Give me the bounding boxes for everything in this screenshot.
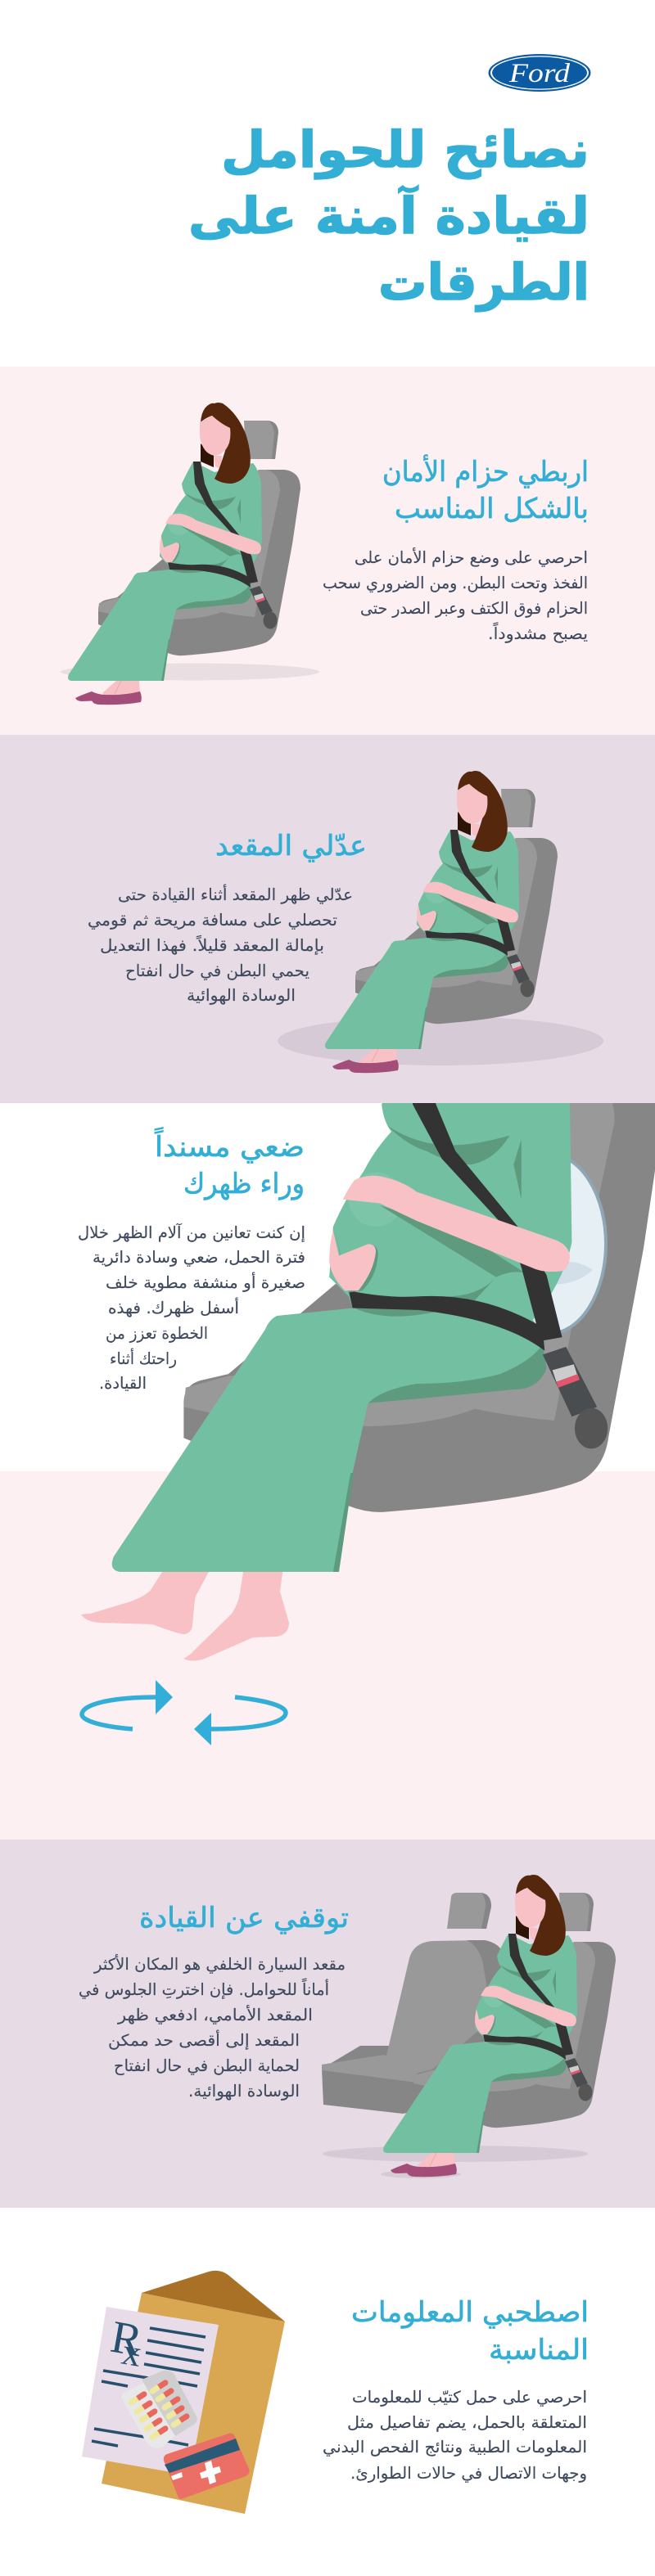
panel: adjust the seat <box>0 735 655 1103</box>
title: لقيادة آمنة على <box>188 185 590 245</box>
Ford logo: Ford <box>508 59 571 88</box>
illustration: envelope and documents <box>82 2271 285 2514</box>
body text: بإمالة المعقد قليلاً. فهذا التعديل <box>100 934 324 956</box>
body text: المعلومات الطبية ونتائج الفحص البدني <box>323 2438 587 2457</box>
body text <box>323 2388 587 2483</box>
body text: تحصلي على مسافة مريحة ثم قومي <box>88 911 337 930</box>
body text: back support: الخطوة تعزز من <box>106 1324 208 1343</box>
body text: back support: إن كنت تعانين من آلام الظهر خلال <box>78 1223 305 1243</box>
body text: وجهات الاتصال في حالات الطوارئ. <box>350 2464 587 2483</box>
panel: back support background <box>0 1103 655 1840</box>
shadow <box>61 663 319 681</box>
heading: عدّلي المقعد <box>215 830 367 862</box>
bare feet <box>81 1567 289 1661</box>
header panel <box>0 0 655 367</box>
body text: الفخذ وتحت البطن. ومن الضروري سحب <box>323 574 588 592</box>
heading <box>351 2296 589 2367</box>
body text <box>88 885 353 1005</box>
body text: back support: صغيرة أو منشفة مطوية خلف <box>106 1272 305 1292</box>
body text: مقعد السيارة الخلفي هو المكان الأكثر <box>93 1954 346 1974</box>
body text: الحزام فوق الكتف وعبر الصدر حتى <box>360 599 588 618</box>
body text: أماناً للحوامل. فإن اخترتِ الجلوس في <box>79 1978 329 2000</box>
heading: back support <box>154 1127 305 1200</box>
body text: عدّلي ظهر المقعد أثناء القيادة حتى <box>118 885 353 904</box>
Ford logo <box>488 54 591 92</box>
heading: اربطي حزام الأمان <box>382 454 589 489</box>
body text: الوسادة الهوائية <box>187 986 296 1005</box>
heading: back support: وراء ظهرك <box>183 1168 305 1200</box>
body text: المقعد الأمامي، ادفعي ظهر <box>117 2005 313 2024</box>
body text: back support: فترة الحمل، ضعي وسادة دائرية <box>93 1248 305 1267</box>
heading: بالشكل المناسب <box>395 493 589 525</box>
illustration: close-up woman with cushion <box>81 1103 655 1661</box>
envelope <box>102 2271 285 2514</box>
illustration: front seat <box>322 1893 504 2114</box>
shadow <box>278 1016 603 1065</box>
body text: back support <box>78 1223 305 1393</box>
icon: rotation arrows <box>82 1680 286 1745</box>
prescription paper: R <box>107 2312 147 2367</box>
shadows <box>323 2146 588 2178</box>
body text: لحماية البطن في حال انفتاح <box>114 2056 300 2075</box>
title: الطرقات <box>378 254 590 312</box>
prescription paper <box>82 2307 219 2475</box>
pill blister <box>121 2371 197 2448</box>
heading: اصطحبي المعلومات <box>351 2296 589 2329</box>
body text <box>79 1954 346 2101</box>
body text: الوسادة الهوائية. <box>188 2082 300 2101</box>
body text: احرصي على حمل كتيّب للمعلومات <box>352 2388 587 2407</box>
body text: back support: أسفل ظهرك. فهذه <box>108 1298 239 1317</box>
heading <box>382 454 589 525</box>
body text: يصبح مشدوداً. <box>488 622 588 643</box>
cushion <box>533 1159 608 1334</box>
illustration: woman in rear seat <box>383 1875 616 2177</box>
body text: احرصي على وضع حزام الأمان على <box>355 547 588 567</box>
body text <box>323 547 588 643</box>
panel: fasten seat belt <box>0 367 655 735</box>
medical card <box>164 2434 249 2499</box>
body text: المتعلقة بالحمل، يضم تفاصيل مثل <box>347 2413 587 2432</box>
title <box>188 121 590 312</box>
body text: يحمي البطن في حال انفتاح <box>125 961 309 980</box>
heading: المناسبة <box>489 2334 589 2367</box>
body text: المقعد إلى أقصى حد ممكن <box>108 2030 300 2051</box>
illustration: woman in seat <box>68 403 300 705</box>
title: نصائح للحوامل <box>221 121 590 179</box>
heading: back support: ضعي مسنداً <box>154 1127 305 1164</box>
panel: bring medical information <box>0 2208 655 2576</box>
body text: back support: القيادة. <box>99 1374 147 1393</box>
body text: back support: راحتك أثناء <box>110 1349 177 1368</box>
prescription paper: x <box>119 2331 145 2375</box>
illustration: woman in seat <box>325 771 558 1073</box>
heading: توقفي عن القيادة <box>139 1902 349 1934</box>
panel: stop driving <box>0 1840 655 2208</box>
